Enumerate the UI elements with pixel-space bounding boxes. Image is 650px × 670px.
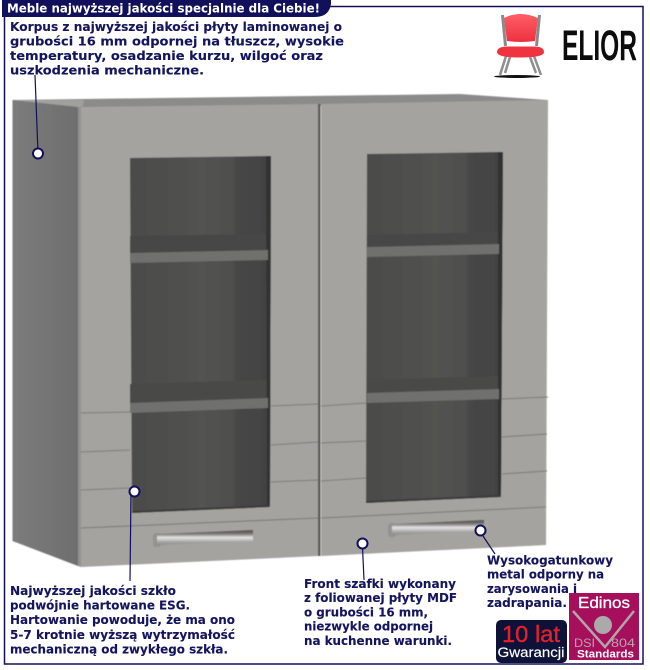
text block: glass: mechaniczną od zwykłego szkła. <box>10 642 228 656</box>
badge: Edinos standards: 804 <box>611 636 635 650</box>
text block: glass: Najwyższej jakości szkło <box>10 584 176 598</box>
text block: glass: 5-7 krotnie wyższą wytrzymałość <box>10 628 235 642</box>
cabinet top <box>12 94 548 108</box>
callout marker: glass <box>130 486 140 581</box>
right door <box>321 100 548 556</box>
text block: front: z foliowanej płyty MDF <box>304 591 457 605</box>
text block: handle metal: Wysokogatunkowy <box>487 554 613 568</box>
text block: cabinet body <box>10 20 344 78</box>
door panel grooves <box>81 397 548 528</box>
text block: front: na kuchenne warunki. <box>304 634 452 648</box>
door gap <box>318 104 320 556</box>
left door glass <box>130 156 271 513</box>
badge: Edinos standards <box>569 593 639 660</box>
badge: Edinos standards: Standards <box>577 648 634 660</box>
text block: handle metal: metal odporny na <box>487 568 604 582</box>
right handle <box>388 520 484 537</box>
text block: glass: Hartowanie powoduje, że ma ono <box>10 613 235 627</box>
text block: cabinet body: grubości 16 mm odpornej na tłuszcz, wysokie <box>10 34 344 48</box>
badge: 10 lat warranty: 10 lat <box>502 621 560 647</box>
right door glass <box>366 152 503 503</box>
text block: front: niezwykle odpornej <box>304 620 433 634</box>
text block: cabinet body: Korpus z najwyższej jakości płyty laminowanej o <box>10 20 342 34</box>
badge: Edinos standards: DSI <box>574 636 595 650</box>
badge: Edinos standards: Edinos <box>578 595 630 612</box>
header tab <box>2 0 331 17</box>
text block: front: Front szafki wykonany <box>304 577 456 591</box>
text block: cabinet body: temperatury, osadzanie kurzu, wilgoć oraz <box>10 49 323 63</box>
callout marker: cabinet body <box>33 75 43 158</box>
text block: front: o grubości 16 mm, <box>304 606 428 620</box>
text block: front <box>304 577 457 648</box>
icon: chair <box>494 14 544 78</box>
left door <box>81 104 318 567</box>
callout marker: handle <box>476 526 495 554</box>
header title: Meble najwyższej jakości specjalnie dla Ciebie! <box>7 2 320 16</box>
left handle <box>153 530 253 547</box>
badge: 10 lat warranty: Gwarancji <box>498 645 564 660</box>
text block: glass <box>10 584 235 656</box>
text block: glass: podwójnie hartowane ESG. <box>10 598 190 612</box>
logo: Elior chair <box>494 14 637 78</box>
text block: handle metal <box>487 554 613 610</box>
cabinet side panel <box>12 100 78 566</box>
badge: 10 lat warranty <box>496 620 567 663</box>
cabinet illustration <box>12 94 548 567</box>
text block: handle metal: zarysowania i <box>487 582 577 596</box>
text block: handle metal: zadrapania. <box>487 596 567 610</box>
text block: cabinet body: uszkodzenia mechaniczne. <box>10 64 204 78</box>
callout marker: front <box>358 538 368 580</box>
